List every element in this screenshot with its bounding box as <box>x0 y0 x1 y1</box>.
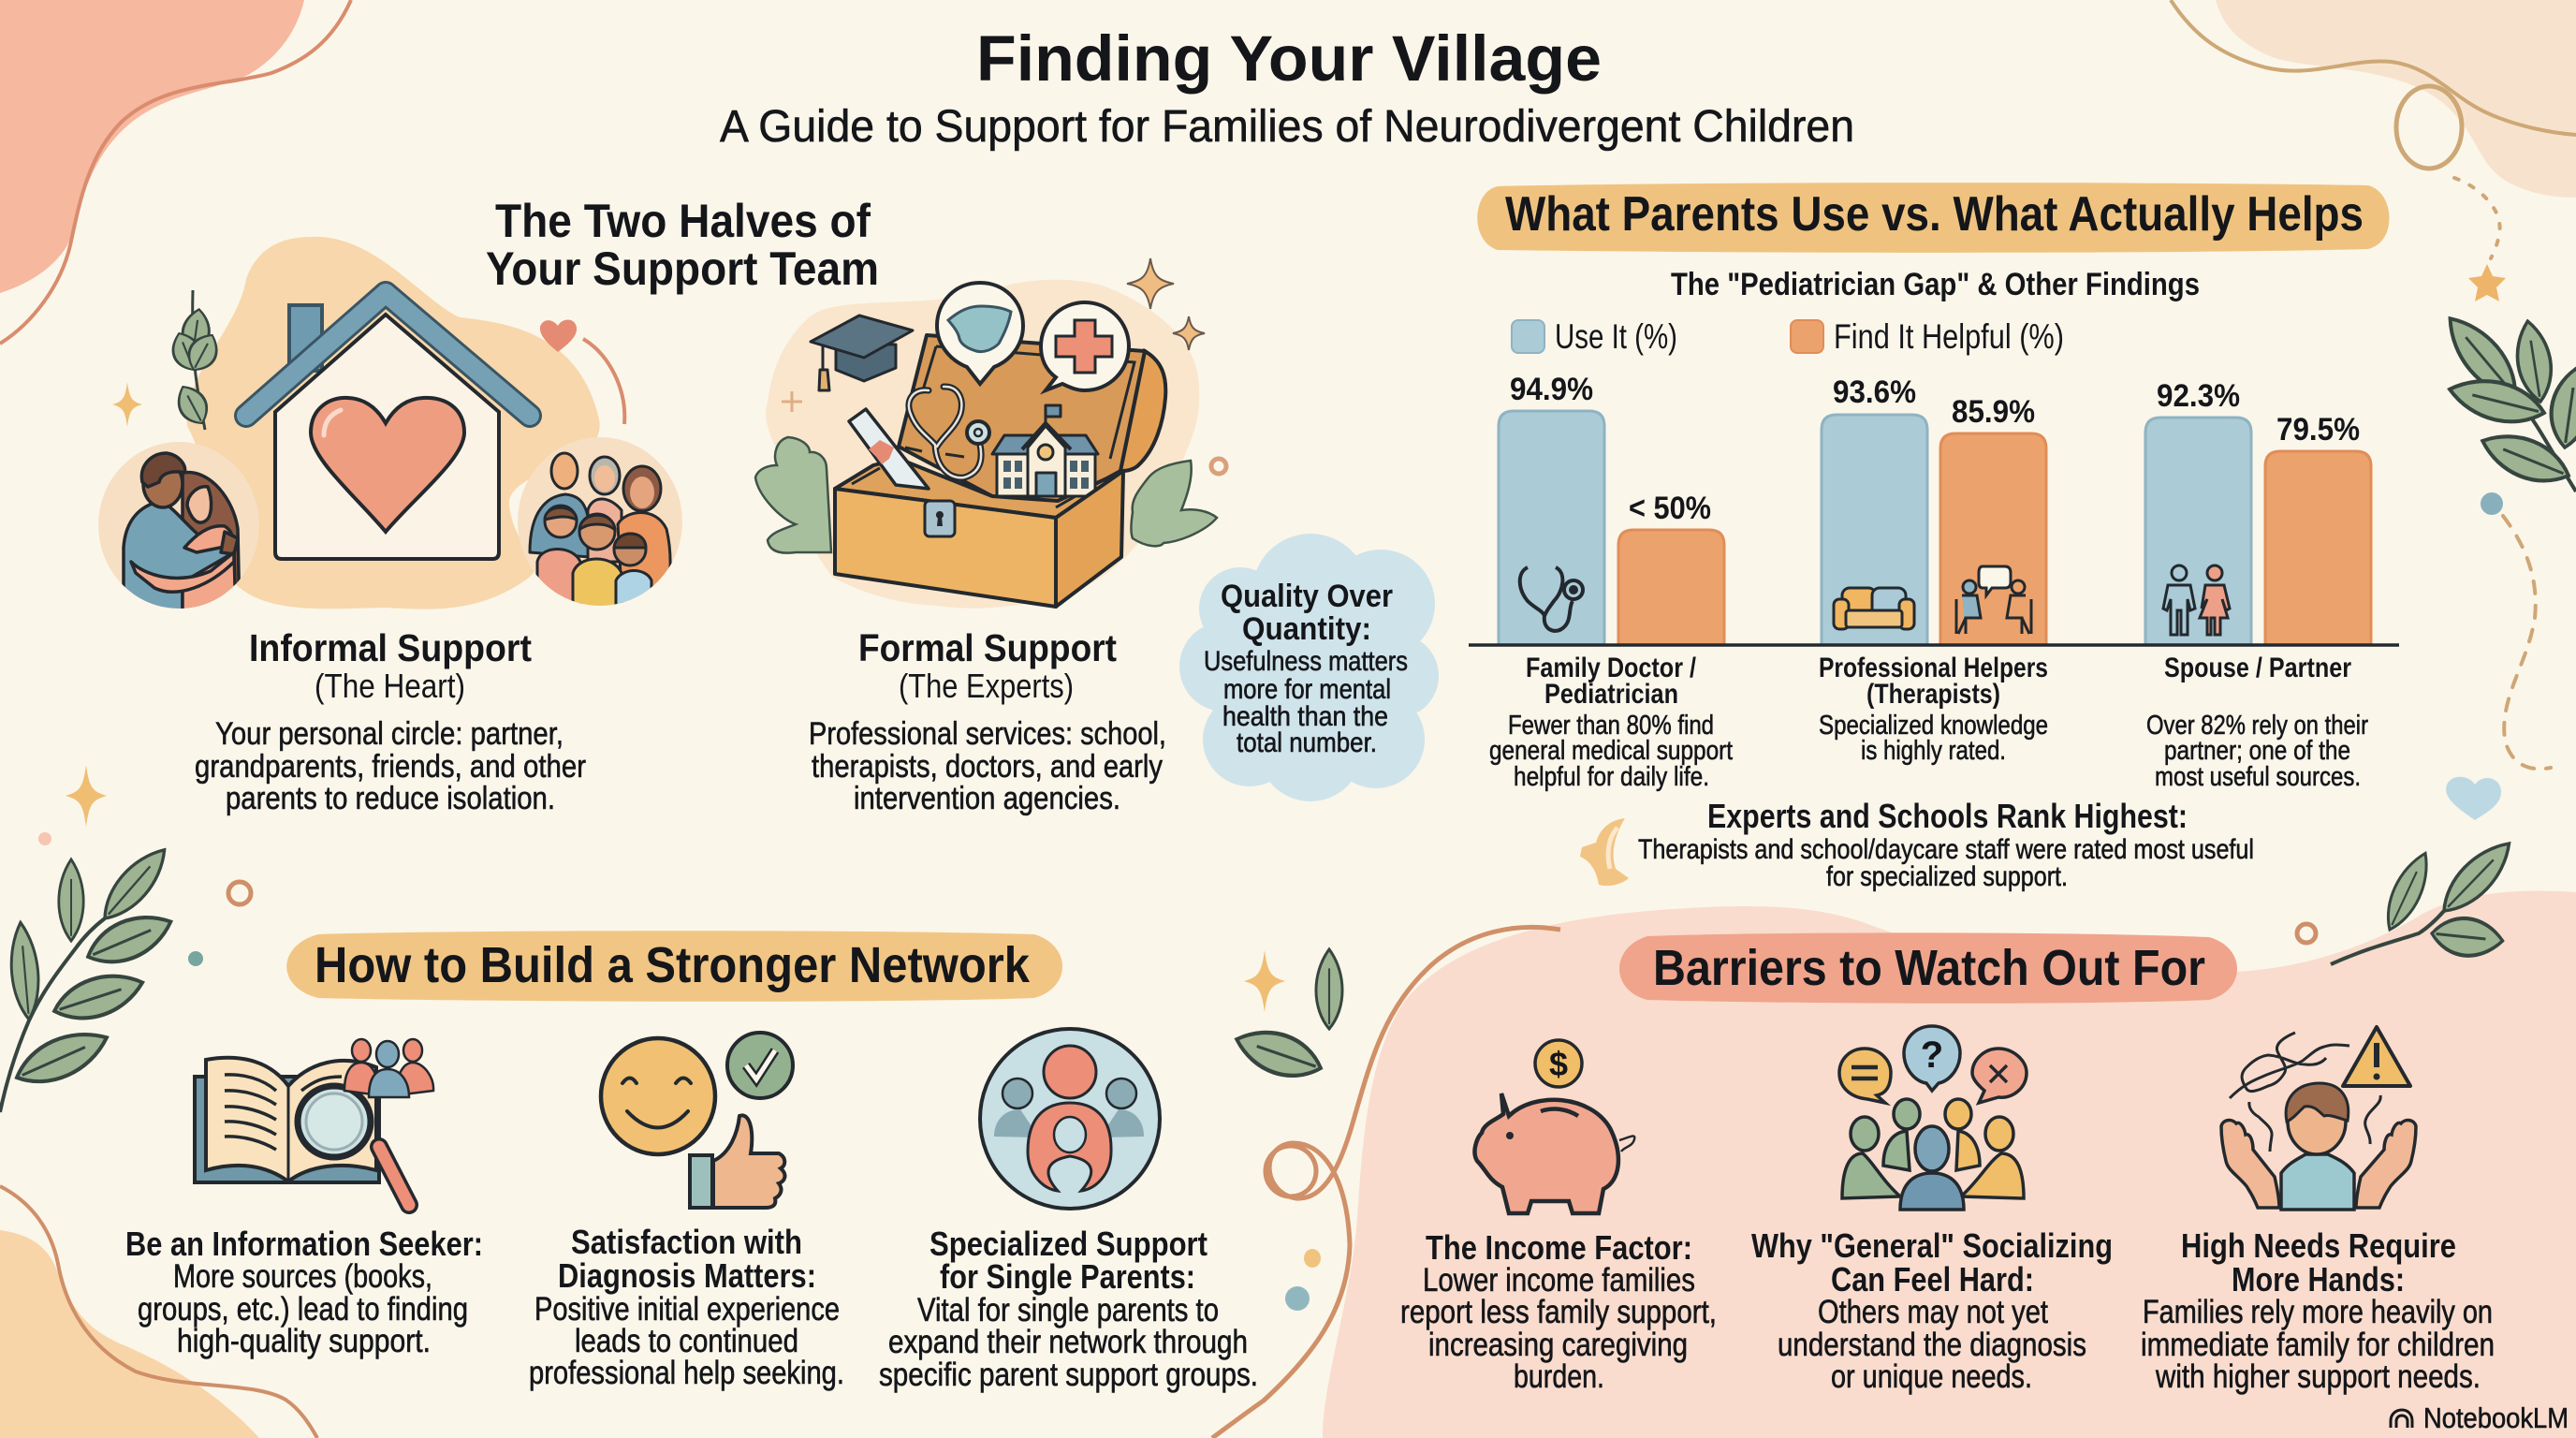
text: income factor: burden. <box>1514 1358 1604 1395</box>
dot <box>1304 1249 1321 1268</box>
label: family doctor: general medical support <box>1489 736 1733 766</box>
sparkle <box>1173 316 1205 350</box>
text: high needs <box>2141 1226 2495 1395</box>
ring: top right <box>2396 86 2462 169</box>
item: satisfaction with diagnosis: professional help seeking. <box>529 1355 844 1391</box>
item: information seeker <box>125 1225 483 1359</box>
bar values: < 50% <box>1629 491 1711 526</box>
text block: experts and schools: Experts and Schools Rank Highest: <box>1707 797 2188 835</box>
text block: formal support <box>809 626 1166 816</box>
icon: coin <box>1535 1040 1582 1087</box>
label: family doctor: Family Doctor / <box>1526 653 1697 683</box>
dot <box>1285 1286 1310 1311</box>
branch: bottom right <box>2331 833 2520 964</box>
heading: two halves: Your Support Team <box>486 242 879 295</box>
text: income factor: report less family support, <box>1400 1294 1717 1330</box>
sparkle <box>66 765 107 827</box>
heading pill: What Parents Use vs. What Actually Helps <box>1505 187 2364 242</box>
label: professional helpers: (Therapists) <box>1866 679 2000 710</box>
text block: formal support: Formal Support <box>858 626 1117 669</box>
text block: formal support: Professional services: school, <box>809 716 1166 752</box>
ring <box>228 882 251 904</box>
text: general socializing: understand the diagnosis <box>1778 1327 2086 1363</box>
item: single parents: Vital for single parents to <box>917 1292 1219 1328</box>
icon: check badge <box>727 1033 793 1098</box>
item: information seeker: high-quality support. <box>177 1323 431 1359</box>
curve: bottom right with loop <box>1212 927 1560 1438</box>
heading pill: How to Build a Stronger Network <box>315 937 1031 993</box>
ring <box>1211 459 1226 474</box>
icon: toolbox <box>766 280 1199 609</box>
heading pill <box>1477 183 2390 253</box>
text block: experts and schools <box>1638 797 2254 892</box>
label: spouse partner: partner; one of the <box>2164 736 2350 766</box>
label: professional helpers <box>1819 653 2048 766</box>
dotted trail: right side <box>2481 492 2551 769</box>
callout: quality over quantity: more for mental <box>1223 674 1391 705</box>
text: general socializing: Others may not yet <box>1818 1294 2048 1330</box>
ring <box>1266 1146 1316 1196</box>
callout: quality over quantity <box>1179 534 1439 801</box>
text: high needs: immediate family for children <box>2141 1327 2495 1363</box>
icon: open book <box>195 1058 409 1205</box>
text: high needs: with higher support needs. <box>2155 1358 2481 1395</box>
callout: quality over quantity: Usefulness matters <box>1204 646 1408 677</box>
callout: quality over quantity: total number. <box>1237 727 1377 758</box>
text block: informal support: Your personal circle: partner, <box>215 716 564 752</box>
text block: informal support: (The Heart) <box>315 667 465 705</box>
callout: quality over quantity: Quantity: <box>1242 611 1371 647</box>
text: income factor: Lower income families <box>1423 1262 1695 1299</box>
label: professional helpers: Professional Helpers <box>1819 653 2048 683</box>
icon: single parent circle <box>980 1029 1160 1209</box>
label: family doctor: Pediatrician <box>1544 679 1678 710</box>
text: high needs: Families rely more heavily on <box>2143 1294 2493 1330</box>
blue heart <box>2446 777 2501 820</box>
text: income factor <box>1400 1228 1717 1395</box>
icon: couple <box>2163 565 2230 635</box>
label: spouse partner <box>2146 653 2368 792</box>
icon: speech bubble nurse cap <box>937 283 1023 384</box>
item: information seeker: Be an Information Seeker: <box>125 1225 483 1263</box>
bar chart <box>1469 372 2399 645</box>
callout: quality over quantity: Quality Over <box>1221 579 1393 614</box>
label: professional helpers: Specialized knowledge <box>1819 711 2048 741</box>
legend: Use It (%) <box>1555 317 1677 356</box>
panel: what parents use <box>1469 183 2399 892</box>
text: general socializing: or unique needs. <box>1831 1358 2032 1395</box>
legend <box>1512 317 2064 356</box>
icon: people group <box>344 1039 433 1097</box>
item: satisfaction with diagnosis: leads to continued <box>575 1323 798 1359</box>
text block: formal support: intervention agencies. <box>854 781 1120 816</box>
item: single parents: Specialized Support <box>929 1225 1208 1263</box>
item: single parents: specific parent support groups. <box>879 1357 1258 1393</box>
text: income factor: increasing caregiving <box>1428 1327 1688 1363</box>
icon: small heart and arc <box>540 320 624 424</box>
icon: smiley face <box>601 1038 715 1154</box>
text block: informal support <box>195 626 586 816</box>
item: information seeker: groups, etc.) lead to finding <box>138 1291 468 1328</box>
icon: graduation cap <box>811 315 913 390</box>
blob: top right <box>2216 0 2576 198</box>
icon: stethoscope <box>1520 567 1583 631</box>
icon: embracing couple <box>98 442 259 618</box>
icon: warning triangle <box>2343 1027 2410 1086</box>
icon: sprig <box>167 290 224 430</box>
star <box>2468 264 2506 301</box>
icon: piggy bank <box>1474 1093 1634 1213</box>
curve: top right <box>2171 0 2576 135</box>
icon: child with hands <box>2221 1033 2416 1210</box>
callout: quality over quantity: health than the <box>1222 701 1388 732</box>
icon: leaf right of toolbox <box>1131 461 1217 546</box>
icon: speech bubbles <box>1839 1026 2027 1103</box>
bar values: 92.3% <box>2157 378 2240 414</box>
label: family doctor <box>1489 653 1733 792</box>
icon: coin: $ <box>1549 1045 1568 1083</box>
text block: formal support: (The Experts) <box>899 667 1074 705</box>
label: spouse partner: Spouse / Partner <box>2164 653 2351 683</box>
chart subtitle: The "Pediatrician Gap" & Other Findings <box>1671 267 2200 302</box>
title: Finding Your Village <box>976 22 1602 95</box>
label: spouse partner: most useful sources. <box>2155 762 2361 792</box>
item: satisfaction with diagnosis: Diagnosis Matters: <box>558 1256 816 1295</box>
bar values: 94.9% <box>1510 372 1593 407</box>
item: information seeker: More sources (books, <box>173 1258 432 1295</box>
text: general socializing <box>1751 1226 2113 1395</box>
curve: top left <box>0 0 351 344</box>
text block: informal support: parents to reduce isolation. <box>226 781 555 816</box>
heading: two halves: The Two Halves of <box>495 195 871 247</box>
text: general socializing: Can Feel Hard: <box>1831 1260 2034 1299</box>
item: single parents: for Single Parents: <box>940 1257 1195 1296</box>
dot <box>38 832 51 845</box>
icon: therapy conversation <box>1956 566 2031 634</box>
label: professional helpers: is highly rated. <box>1861 736 2006 766</box>
icon: sofa <box>1834 588 1914 629</box>
text: high needs: High Needs Require <box>2181 1226 2456 1265</box>
icon: people in a circle <box>1842 1099 2024 1210</box>
text block: informal support: Informal Support <box>249 626 532 669</box>
leaf <box>1316 949 1342 1029</box>
bar values: 85.9% <box>1952 394 2035 430</box>
text block: formal support: therapists, doctors, and early <box>812 749 1163 785</box>
icon: extended family <box>518 437 682 613</box>
icon: speech bubbles: ? <box>1921 1034 1943 1076</box>
curve: bottom left <box>0 1186 317 1438</box>
icon: thumbs up <box>690 1115 784 1208</box>
text block: informal support: grandparents, friends, and other <box>195 749 586 785</box>
leaf <box>1230 1021 1327 1087</box>
legend: Find It Helpful (%) <box>1834 317 2064 356</box>
label: spouse partner: Over 82% rely on their <box>2146 711 2368 741</box>
panel: two halves <box>98 195 1226 816</box>
sparkle <box>1127 258 1174 309</box>
item: single parents <box>879 1225 1258 1393</box>
dotted trail: top right <box>2454 178 2500 258</box>
blob: bottom right <box>1323 891 2576 1438</box>
plus mark <box>782 391 802 412</box>
text: income factor: The Income Factor: <box>1426 1228 1692 1267</box>
panel: build network <box>125 931 1258 1393</box>
ring <box>2297 924 2316 943</box>
text: high needs: More Hands: <box>2232 1260 2405 1299</box>
heading pill: Barriers to Watch Out For <box>1653 940 2205 996</box>
icon: leaf left of toolbox <box>755 437 831 553</box>
item: satisfaction with diagnosis: Positive initial experience <box>534 1291 840 1328</box>
heading: two halves <box>486 195 879 295</box>
bar values: 79.5% <box>2276 412 2360 448</box>
item: single parents: expand their network through <box>888 1324 1248 1360</box>
sparkle <box>112 382 142 427</box>
icon: orange curl <box>1580 818 1629 886</box>
blob: bottom left <box>0 1230 259 1438</box>
bar values: 93.6% <box>1833 374 1916 410</box>
subtitle: A Guide to Support for Families of Neurodivergent Children <box>720 102 1854 152</box>
label: family doctor: Fewer than 80% find <box>1508 711 1714 741</box>
sparkle <box>1244 950 1285 1012</box>
dot <box>188 951 203 966</box>
blob: top left <box>0 0 304 293</box>
panel: barriers <box>1400 932 2495 1395</box>
branch: left <box>0 841 178 1112</box>
text block: experts and schools: Therapists and school/daycare staff were rated most useful <box>1638 834 2254 865</box>
item: satisfaction with diagnosis: Satisfaction with <box>571 1223 802 1261</box>
label: family doctor: helpful for daily life. <box>1514 762 1709 792</box>
bar values <box>1510 372 2360 526</box>
item: satisfaction with diagnosis <box>529 1223 844 1391</box>
icon: house with heart <box>187 237 600 609</box>
text block: experts and schools: for specialized support. <box>1826 861 2068 892</box>
branch: top right <box>2437 307 2576 492</box>
icon: speech bubble medical cross <box>1041 302 1129 390</box>
text: general socializing: Why "General" Socializing <box>1751 1226 2113 1265</box>
